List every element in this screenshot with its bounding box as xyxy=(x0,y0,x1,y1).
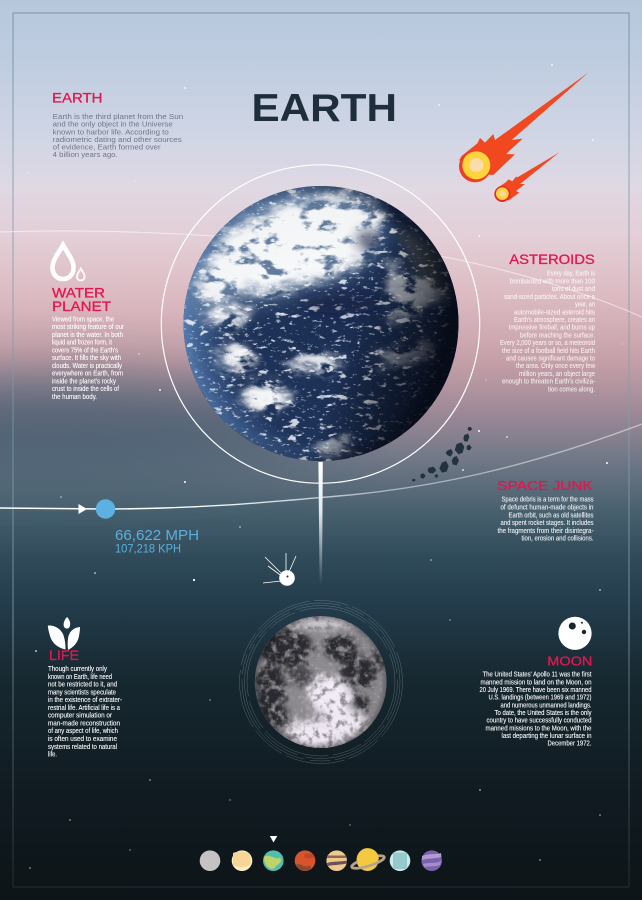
speed label: 66,622 MPH xyxy=(115,527,199,544)
text: moon: manned mission to land on the Moon, on xyxy=(480,677,592,686)
planet earth xyxy=(180,179,465,465)
text: asteroids: the area. Only once every few xyxy=(516,361,596,370)
text: asteroids xyxy=(500,269,596,393)
heading: space junk: SPACE JUNK xyxy=(497,479,594,493)
text: water planet: liquid and frozen form, it xyxy=(52,338,112,347)
text: moon: The United States' Apollo 11 was the first xyxy=(482,670,592,679)
text: asteroids: before reaching the surface. xyxy=(520,330,595,339)
text: life: many scientists speculate xyxy=(48,687,116,696)
text: space junk: Space debris is a term for the mass xyxy=(502,495,594,504)
text: water planet: the human body. xyxy=(52,392,97,401)
speed label xyxy=(115,527,199,555)
land hint xyxy=(395,225,443,288)
text: life: Though currently only xyxy=(48,664,107,673)
text: asteroids: million years, an object large xyxy=(519,369,595,378)
icon: leaves xyxy=(48,617,80,650)
text: asteroids: tion comes along. xyxy=(548,384,595,393)
jupiter xyxy=(326,850,347,871)
text: asteroids: impressive fireball, and burns up xyxy=(509,323,595,332)
text: space junk: the fragments from their disintegra- xyxy=(498,526,594,535)
heading: asteroids: ASTEROIDS xyxy=(509,251,595,267)
text: water planet: clouds. Water is practically xyxy=(52,361,122,370)
mercury xyxy=(200,850,220,871)
text: earth intro: and the only object in the Universe xyxy=(53,120,173,129)
heading: moon: MOON xyxy=(547,653,592,668)
text: water planet: everywhere on Earth, from xyxy=(52,369,123,378)
text: life: of any aspect of life, which xyxy=(48,726,118,735)
text: asteroids: enough to threaten Earth's civiliza- xyxy=(502,377,596,386)
vertical connector xyxy=(318,462,323,585)
text: earth intro: radiometric dating and other sources xyxy=(53,135,182,144)
text: life: systems related to natural xyxy=(48,742,117,751)
text: water planet: covers 75% of the Earth's xyxy=(52,345,118,354)
text: moon: country to have successfully conducted xyxy=(486,716,592,725)
earth icon xyxy=(263,850,284,871)
text: asteroids: Every day, Earth is xyxy=(547,269,595,278)
text: moon: last departing the lunar surface in xyxy=(502,731,592,740)
uranus xyxy=(390,850,410,871)
icon: small comet xyxy=(494,152,559,202)
text: asteroids: bombarded with more than 100 xyxy=(510,276,595,285)
text: asteroids: tons of dust and xyxy=(552,284,595,293)
text: water planet: crust to inside the cells of xyxy=(52,384,119,393)
text: space junk: of defunct human-made objects in xyxy=(500,502,594,512)
text: moon: To date, the United States is the only xyxy=(494,708,592,717)
main cloud swaths xyxy=(195,195,450,455)
text: moon: manned missions to the Moon, with the xyxy=(486,723,592,732)
icon: sputnik satellite xyxy=(263,553,296,586)
text: life: not be restricted to it, and xyxy=(48,680,117,689)
text: earth intro: Earth is the third planet from the Sun xyxy=(53,112,183,121)
planet row xyxy=(200,848,442,871)
text: asteroids: sand-sized particles. About once a xyxy=(504,292,595,301)
text: space junk: and spent rocket stages. It includes xyxy=(500,518,594,527)
text: asteroids: automobile-sized asteroid hits xyxy=(514,307,595,316)
text: life: in the existence of extrater- xyxy=(48,695,123,704)
text: asteroids: Earth's atmosphere, creates an xyxy=(514,315,595,324)
text: moon: and numerous unmanned landings. xyxy=(500,700,592,709)
text: water planet: surface. It fills the sky with xyxy=(52,353,121,362)
text: life: is often used to examine xyxy=(48,734,117,743)
text: life: known on Earth, life need xyxy=(48,672,112,681)
text: asteroids: the size of a football field hits Earth xyxy=(502,346,595,355)
text: space junk: tion, erosion and collisions. xyxy=(522,534,594,543)
heading: water planet xyxy=(52,286,111,314)
title: EARTH xyxy=(252,87,397,130)
upper orbit line xyxy=(0,231,642,317)
icon: water drops xyxy=(52,245,85,280)
arrow on orbit xyxy=(78,504,87,514)
dark ocean patches xyxy=(298,200,426,319)
saturn xyxy=(351,848,385,871)
icon: moon xyxy=(558,617,592,650)
orbit ring around earth xyxy=(161,165,480,483)
text: life xyxy=(48,664,123,759)
text: life: restrial life. Artificial life is a xyxy=(48,703,120,712)
text: water planet: inside the planet's rocky xyxy=(52,376,116,385)
text: moon: U.S. landings (between 1969 and 1972) xyxy=(488,693,592,702)
text: water planet: Viewed from space, the xyxy=(52,314,114,324)
text: earth intro: of evidence, Earth formed over xyxy=(53,142,161,152)
upper hazy blue area xyxy=(185,185,385,320)
text: earth intro: 4 billion years ago. xyxy=(53,150,118,159)
heading: earth: EARTH xyxy=(52,90,102,106)
moon xyxy=(254,616,387,748)
scattered flecks xyxy=(180,180,465,465)
text: asteroids: year, an xyxy=(575,300,595,308)
venus xyxy=(232,850,252,871)
lower orbit line xyxy=(0,424,642,509)
text: life: computer simulation or xyxy=(48,711,113,720)
icon: space debris rocks xyxy=(412,427,472,482)
text: asteroids: and causes significant damage to xyxy=(506,354,595,362)
text: asteroids: Every 2,000 years or so, a meteoroid xyxy=(500,338,595,347)
text: space junk: Earth orbit, such as old satellites xyxy=(508,510,594,519)
speed label: 107,218 KPH xyxy=(115,543,181,555)
moon orbit rings xyxy=(240,600,402,764)
text: water planet xyxy=(52,314,125,401)
text: life: man-made reconstruction xyxy=(48,718,120,728)
text: moon: December 1972. xyxy=(548,739,592,748)
heading: water planet: WATER xyxy=(52,286,105,300)
current planet marker xyxy=(270,836,277,842)
text: space junk xyxy=(498,495,594,543)
heading: life: LIFE xyxy=(49,647,79,663)
text: earth intro: known to harbor life. According to xyxy=(53,127,169,136)
heading: water planet: PLANET xyxy=(52,299,111,314)
mars xyxy=(295,850,315,871)
text: life: life. xyxy=(48,750,57,759)
text: water planet: planet is the water. In both xyxy=(52,330,123,339)
text: water planet: most striking feature of our xyxy=(52,322,125,331)
text: earth intro xyxy=(53,112,183,159)
earth position dot xyxy=(96,499,115,519)
neptune xyxy=(421,850,442,871)
text: moon: 20 July 1969. There have been six manned xyxy=(480,685,592,694)
icon: large comet xyxy=(459,73,588,182)
text: moon xyxy=(480,670,592,748)
